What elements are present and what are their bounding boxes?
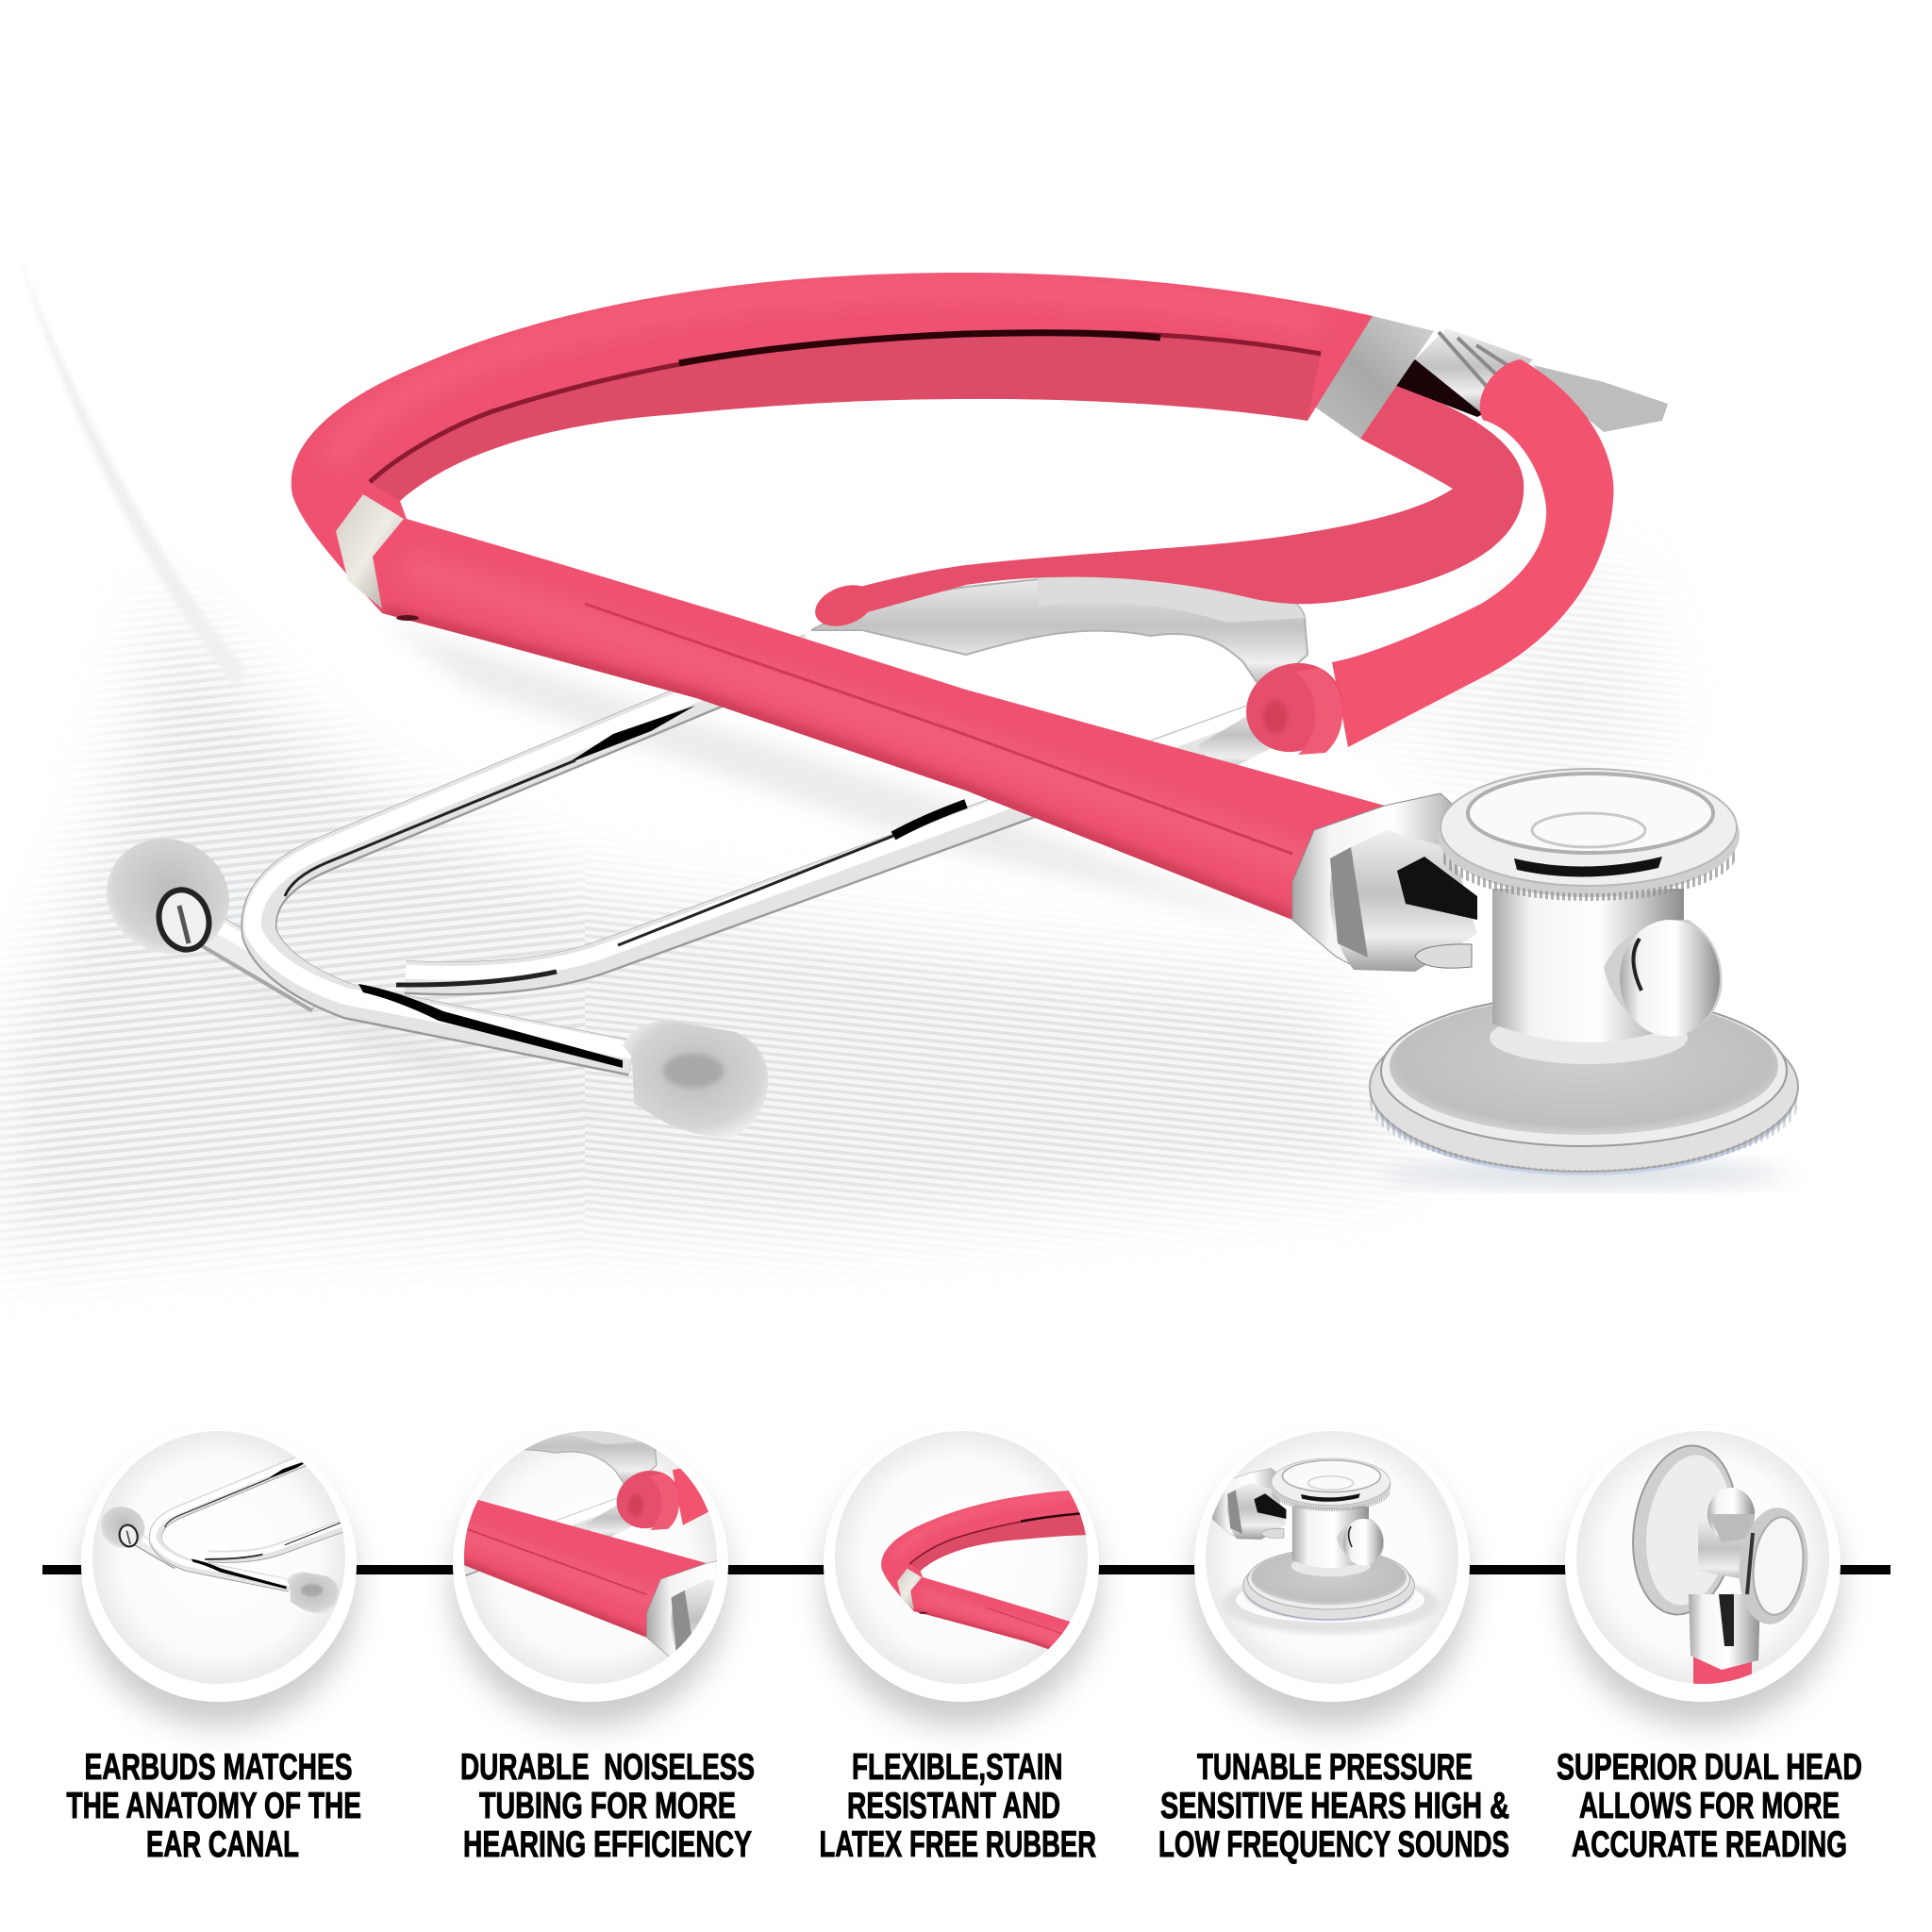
feature circle 4: tunable chestpiece	[1194, 1426, 1470, 1702]
caption 1: EAR CANAL	[146, 1824, 299, 1865]
spring metal band	[811, 572, 1307, 693]
main double tube	[291, 273, 1385, 920]
chrome binaurals with ear tips	[88, 645, 1274, 1138]
caption 2: HEARING EFFICIENCY	[463, 1824, 752, 1865]
tube ferrule	[1231, 647, 1357, 768]
caption 3	[819, 1747, 1096, 1865]
background wave pattern	[0, 311, 1663, 1270]
caption 4: TUNABLE PRESSURE	[1197, 1747, 1473, 1788]
timeline rule	[42, 1565, 1890, 1574]
caption 3: LATEX FREE RUBBER	[819, 1824, 1096, 1865]
caption 2: TUBING FOR MORE	[479, 1786, 736, 1826]
caption 3: FLEXIBLE,STAIN	[852, 1747, 1062, 1788]
shadows under stethoscope	[160, 566, 1787, 1186]
caption 2: DURABLE NOISELESS	[460, 1747, 755, 1788]
caption 1	[66, 1747, 361, 1865]
thin rear tube	[809, 384, 1524, 634]
caption 4: LOW FREQUENCY SOUNDS	[1158, 1824, 1509, 1865]
feature circle 5: dual head	[1565, 1426, 1840, 1702]
feature circle 2: tubing	[440, 1431, 741, 1740]
clip and spring coil	[1307, 316, 1668, 439]
caption 2	[460, 1747, 755, 1865]
caption 1: EARBUDS MATCHES	[85, 1747, 353, 1788]
caption 3: RESISTANT AND	[847, 1786, 1060, 1826]
caption 1: THE ANATOMY OF THE	[66, 1786, 361, 1826]
right tube	[1332, 359, 1613, 747]
caption 4: SENSITIVE HEARS HIGH &	[1160, 1786, 1509, 1826]
main stethoscope photo illustration	[88, 273, 1798, 1175]
caption 4	[1158, 1747, 1509, 1865]
feature circle 1: earbuds	[68, 1431, 370, 1740]
feature circle 3: flexible rubber tube	[809, 1431, 1113, 1740]
chestpiece	[1292, 769, 1798, 1175]
caption 5	[1557, 1747, 1862, 1865]
